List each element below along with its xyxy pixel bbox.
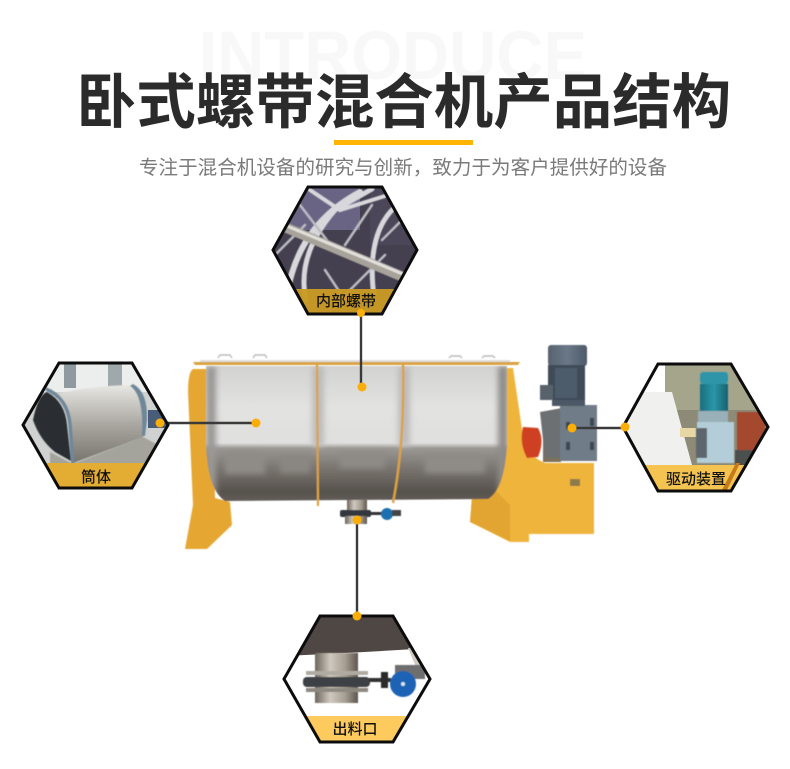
top flange and lid handles bbox=[193, 362, 520, 365]
connector: left bbox=[165, 418, 260, 428]
title: 卧式螺带混合机产品结构 bbox=[77, 69, 731, 136]
shaded leg face bbox=[470, 490, 510, 541]
label band bbox=[306, 716, 406, 740]
gearbox bbox=[540, 408, 562, 458]
hexagon outline bbox=[273, 187, 417, 314]
label band bbox=[646, 465, 744, 490]
dot bbox=[620, 422, 630, 432]
background word: INTRODUCE: INTRODUCE bbox=[199, 17, 587, 94]
connector: top bbox=[358, 314, 366, 392]
panel: drive unit bbox=[620, 360, 770, 495]
dot bbox=[156, 418, 164, 428]
hexagon outline bbox=[23, 363, 168, 488]
hexagon outline bbox=[623, 364, 768, 491]
label: 出料口 bbox=[332, 721, 378, 738]
label band bbox=[46, 463, 144, 486]
label: 内部螺带 bbox=[316, 293, 376, 310]
control box bbox=[570, 479, 580, 486]
panel: drum shell bbox=[20, 360, 170, 490]
panel: discharge port bbox=[280, 612, 435, 746]
motor bbox=[548, 345, 587, 366]
right leg and drive base bbox=[470, 368, 594, 542]
left end plate and foot bbox=[185, 369, 232, 549]
panel: inner ribbon bbox=[270, 185, 420, 317]
drum body bbox=[206, 366, 507, 501]
dot bbox=[357, 309, 365, 317]
discharge pipe and valve bbox=[347, 500, 367, 511]
dot bbox=[352, 612, 362, 620]
connector: bottom bbox=[352, 516, 362, 616]
mottled reflections on drum bbox=[206, 366, 508, 496]
label: 筒体 bbox=[81, 469, 111, 486]
label band bbox=[296, 289, 394, 312]
accent bar under title bbox=[334, 140, 473, 145]
red coupling bbox=[522, 427, 542, 458]
subtitle: 专注于混合机设备的研究与创新，致力于为客户提供好的设备 bbox=[139, 157, 667, 179]
label: 驱动装置 bbox=[666, 471, 726, 488]
hexagon outline bbox=[284, 616, 430, 742]
drum stiffener ribs bbox=[317, 363, 318, 506]
machine: horizontal ribbon mixer bbox=[185, 345, 597, 549]
connector: right bbox=[568, 424, 626, 432]
